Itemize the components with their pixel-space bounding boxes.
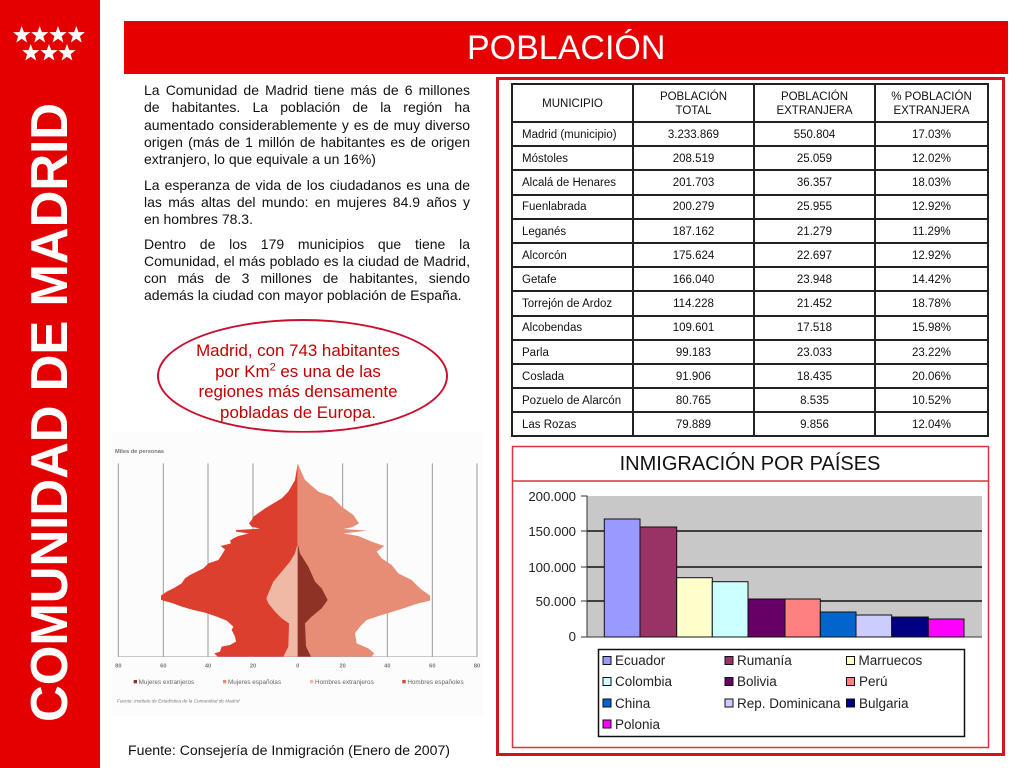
women foreign [298,543,328,657]
title banner: POBLACIÓN [467,29,665,67]
table: municipalities: Alcalá de Henares [522,177,616,189]
text block: life expectancy: La esperanza de vida de los ciudadanos es una de las más altas del mundo: en mujeres 84.9 años y en hombres 78.3. [144,176,470,227]
chart: population pyramid: 40 [384,663,390,669]
chart legend: Bolivia [737,674,777,689]
table: municipalities: EXTRANJERA [776,105,853,117]
sidebar: red band with region name [0,0,100,768]
men Spanish [161,463,298,657]
table: municipalities: 17.518 [797,322,832,334]
chart: population pyramid: 60 [429,663,435,669]
chart legend: Perú [859,674,888,689]
table: municipalities: 187.162 [673,226,714,238]
table: municipalities: 550.804 [794,129,835,141]
table: municipalities: 166.040 [673,274,714,286]
callout text [196,341,400,422]
bar chart: immigration by country: 50.000 [536,594,576,609]
table: municipalities: Móstoles [522,153,568,165]
table: municipalities: 23.22% [912,347,951,359]
table: municipalities: Leganés [522,226,566,238]
table: municipalities: Parla [522,347,549,359]
table: municipalities: Pozuelo de Alarcón [522,395,621,407]
callout text: Madrid, con 743 habitantes [196,341,400,360]
text block: municipalities: Dentro de los 179 municipios que tiene la Comunidad, el más poblado es la ciudad de Madrid, con más de 3 millones de habitantes, siendo además la ciudad con mayor población de España. [144,236,470,303]
table: municipalities: 15.98% [912,322,951,334]
table: municipalities: 3.233.869 [668,129,719,141]
table: municipalities: 23.948 [797,274,832,286]
table: municipalities: Las Rozas [522,419,576,431]
chart: population pyramid: Hombres españoles [407,679,464,686]
table: municipalities: 36.357 [797,177,832,189]
table: municipalities: 18.78% [912,298,951,310]
chart legend: Polonia [615,717,661,732]
bar chart: immigration by country [528,489,982,644]
chart: population pyramid: 80 [115,663,121,669]
chart: population pyramid: Fuente: Instituto de Estadística de la Comunidad de Madrid [117,698,240,703]
table: municipalities: 80.765 [676,395,711,407]
bar chart: immigration by country: 100.000 [528,560,576,575]
table: municipalities: 200.279 [673,201,714,213]
women Spanish [298,463,430,657]
text block: introduction: La Comunidad de Madrid tiene más de 6 millones de habitantes. La población de la región ha aumentado considerablemente y es de muy diverso origen (más de 1 millón de habitantes es de origen extranjero, lo que equivale a un 16%) [144,82,470,167]
table: municipalities: 208.519 [673,153,714,165]
table: municipalities [511,83,989,437]
icon: flag stars of Madrid [13,26,85,60]
table: municipalities: 11.29% [912,226,951,238]
bar chart: immigration by country: 200.000 [528,489,576,504]
chart: population pyramid: 60 [160,663,166,669]
table: municipalities: 18.03% [912,177,951,189]
table: municipalities: Madrid (municipio) [522,129,617,141]
chart legend: Bulgaria [859,696,909,711]
table: municipalities: 175.624 [673,250,714,262]
table: municipalities: 20.06% [912,371,951,383]
callout: density ellipse [157,319,448,433]
chart legend: Rep. Dominicana [737,696,841,711]
chart legend [598,650,964,736]
men foreign [266,543,298,657]
panel: right red frame [496,77,1005,756]
callout text: pobladas de Europa. [220,402,376,422]
table: municipalities: Fuenlabrada [522,201,587,213]
table: municipalities: Torrejón de Ardoz [522,298,612,310]
chart: population pyramid: Mujeres españolas [228,679,281,686]
table: municipalities: POBLACIÓN [660,90,727,102]
table: municipalities: POBLACIÓN [781,90,848,102]
table: municipalities: 23.033 [797,347,832,359]
table: municipalities: 12.92% [912,250,951,262]
callout text: regiones más densamente [198,382,398,401]
chart legend: China [615,696,651,711]
table: municipalities: Alcorcón [522,250,567,262]
chart: population pyramid: Miles de personas [115,449,164,455]
table: municipalities: 10.52% [912,395,951,407]
table: municipalities: 9.856 [800,419,829,431]
bar chart: immigration by country: 0 [569,629,576,644]
chart: population pyramid: 80 [474,663,480,669]
callout text: por Km2 es una de las [215,361,381,380]
table: municipalities: Coslada [522,371,564,383]
bar chart: immigration by country: 150.000 [528,524,576,539]
table: municipalities: 25.955 [797,201,832,213]
table: municipalities: 12.92% [912,201,951,213]
title banner [124,21,1008,74]
table: municipalities: 8.535 [800,395,829,407]
table: municipalities: 79.889 [676,419,711,431]
chart: population pyramid: 20 [340,663,346,669]
chart legend: Ecuador [615,653,666,668]
table: municipalities: 12.02% [912,153,951,165]
table: municipalities: 25.059 [797,153,832,165]
chart legend: Colombia [615,674,673,689]
table: municipalities: Getafe [522,274,557,286]
table: municipalities: 91.906 [676,371,711,383]
table: municipalities: EXTRANJERA [893,105,970,117]
table: municipalities: MUNICIPIO [542,98,603,110]
table: municipalities: 17.03% [912,129,951,141]
chart: population pyramid [115,432,480,703]
table: municipalities: TOTAL [676,105,712,117]
table: municipalities: Alcobendas [522,322,582,334]
chart: population pyramid: 0 [296,663,299,669]
table: municipalities: % POBLACIÓN [891,90,972,102]
table: municipalities: 14.42% [912,274,951,286]
table: municipalities: 99.183 [676,347,711,359]
table: municipalities: 114.228 [673,298,714,310]
table: municipalities: 21.452 [797,298,832,310]
chart: population pyramid: Mujeres extranjeros [139,679,194,686]
table: municipalities: 201.703 [673,177,714,189]
chart legend: Rumanía [737,653,792,668]
vertical title: COMUNIDAD DE MADRID [21,103,79,722]
chart heading: INMIGRACIÓN POR PAÍSES [620,452,880,475]
table: municipalities: 22.697 [797,250,832,262]
chart legend: Marruecos [858,653,923,668]
table: municipalities: 18.435 [797,371,832,383]
chart: population pyramid: Hombres extranjeros [315,679,374,686]
source note: Fuente: Consejería de Inmigración (Enero de 2007) [128,742,450,758]
chart: population pyramid: 40 [205,663,211,669]
table: municipalities: 12.04% [912,419,951,431]
chart: population pyramid: 20 [250,663,256,669]
table: municipalities: 21.279 [797,226,832,238]
table: municipalities: 109.601 [673,322,714,334]
